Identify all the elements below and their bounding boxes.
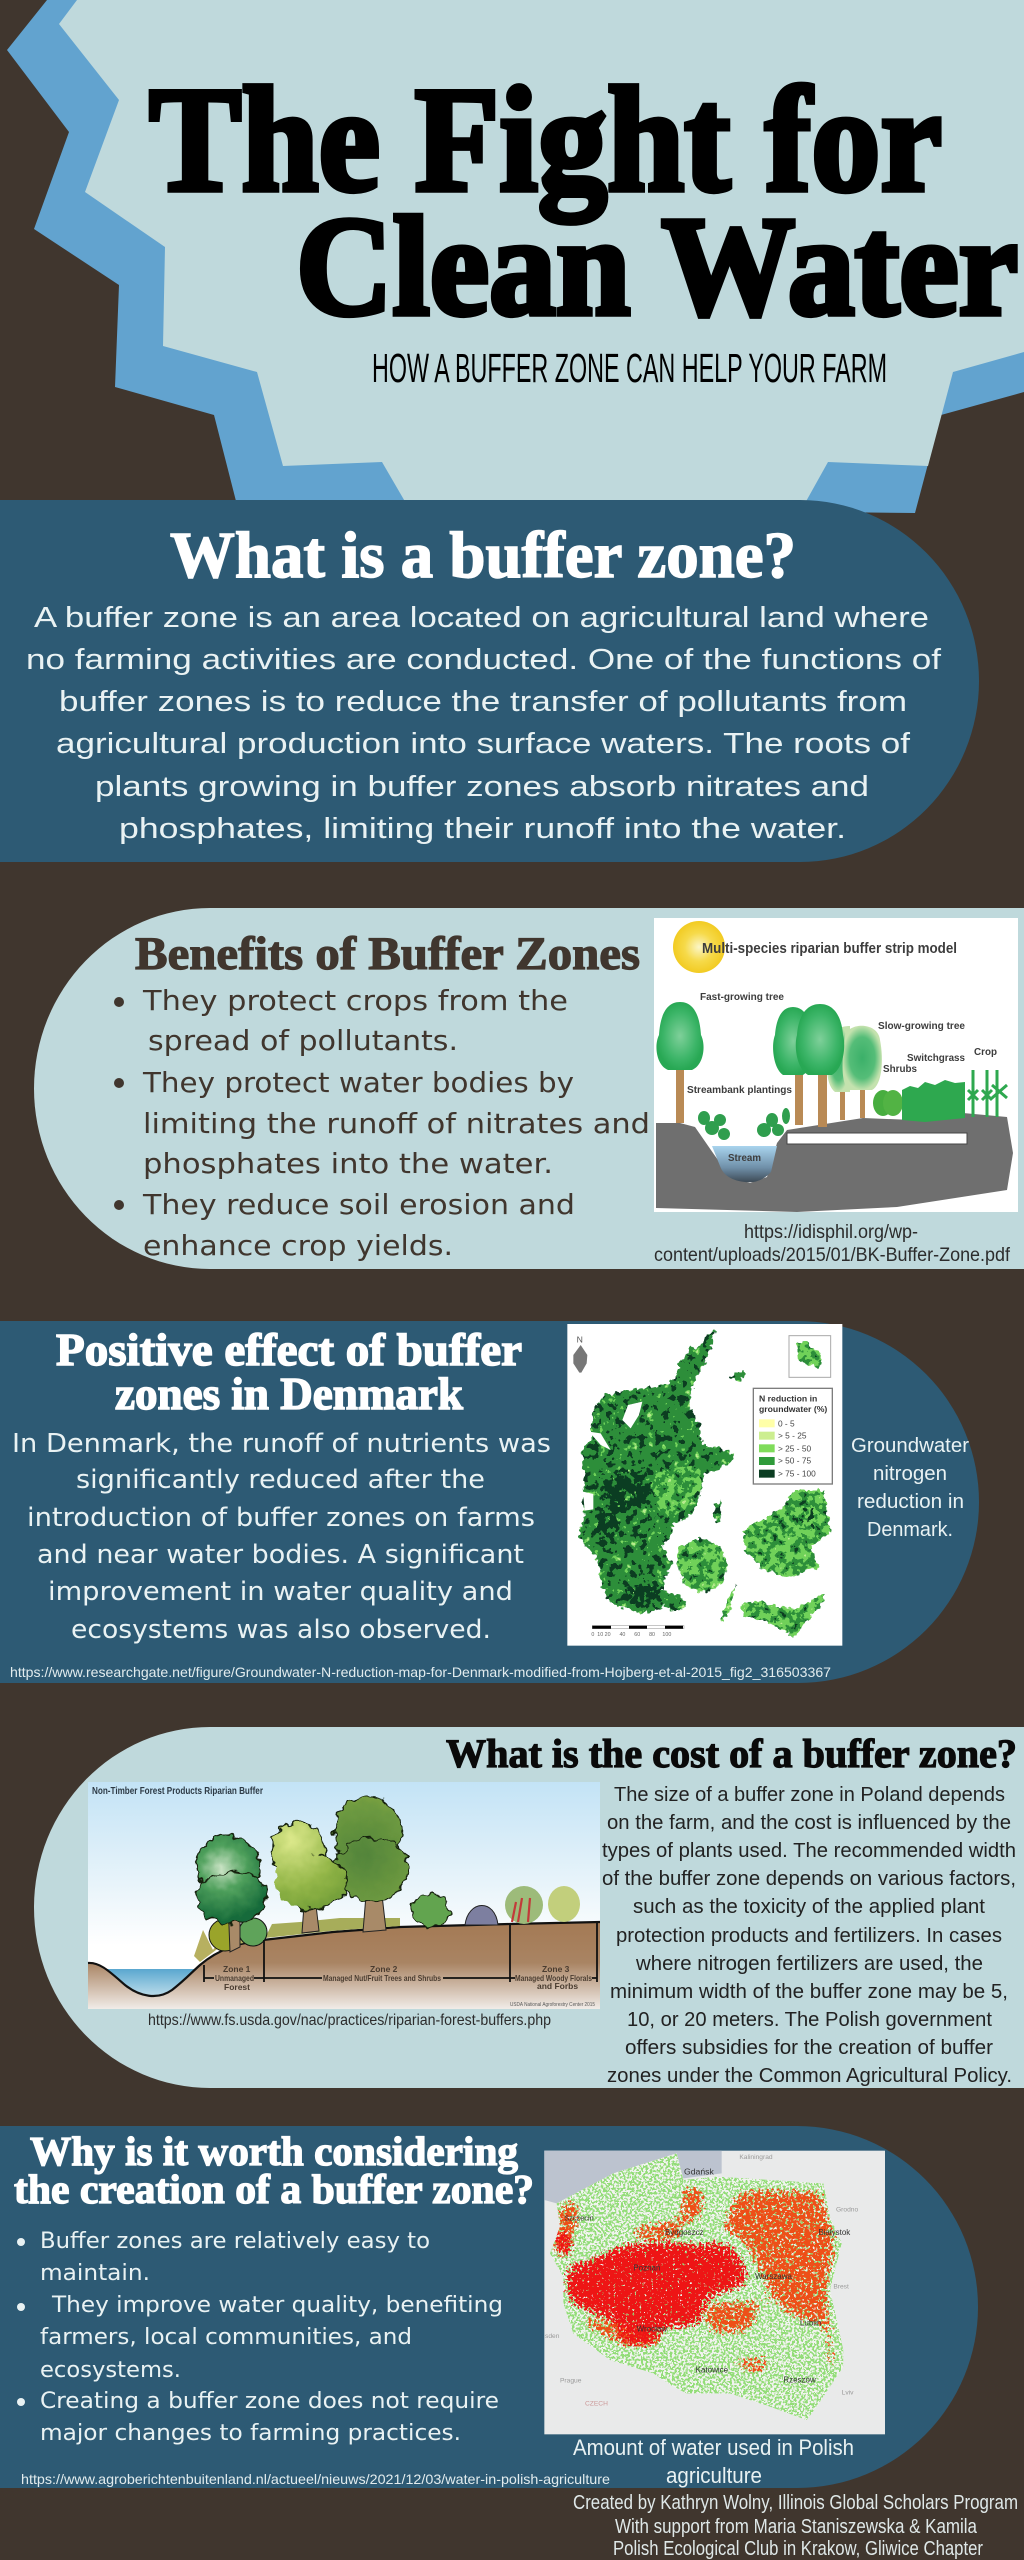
florals shrubs: [505, 1886, 580, 1924]
sky: [88, 1782, 600, 2009]
light jagged shape: [59, 0, 1024, 505]
bullet list: They reduce soil erosion and: [142, 1189, 575, 1221]
body text: and near water bodies. A significant: [37, 1540, 524, 1570]
diagram labels: [687, 941, 997, 1164]
dark patches: [587, 1463, 822, 1612]
panel background: [0, 500, 979, 862]
city labels: Lublin: [800, 2319, 821, 2328]
ground: [656, 1113, 1013, 1212]
city labels: [564, 2166, 850, 2384]
panel background: [0, 2126, 978, 2488]
body text: where nitrogen fertilizers are used, the: [635, 1952, 983, 1975]
inset frame: [789, 1336, 831, 1377]
map: water used in Polish agriculture: Grodno: [836, 2207, 858, 2214]
header: title area: [7, 0, 1024, 513]
poland land cover: [550, 2154, 844, 2420]
city labels: Białystok: [818, 2228, 850, 2237]
map legend: > 75 - 100: [778, 1468, 816, 1478]
body text: offers subsidies for the creation of buffer: [625, 2036, 993, 2059]
body text: 10, or 20 meters. The Polish government: [627, 2008, 992, 2031]
bullet list: Creating a buffer zone does not require: [40, 2389, 499, 2414]
diagram labels: Multi-species riparian buffer strip model: [702, 941, 957, 957]
image source caption: [654, 1221, 1011, 1266]
map caption: Amount of water used in Polish: [573, 2435, 854, 2460]
diagram labels: Unmanaged: [215, 1973, 254, 1983]
diagram labels: Slow-growing tree: [878, 1021, 965, 1032]
body text: of the buffer zone depends on various factors,: [602, 1867, 1016, 1890]
title: The Fight for: [149, 57, 942, 223]
panel background: [34, 1727, 1024, 2088]
panel: positive effect in Denmark: [0, 1321, 979, 1683]
body text: [26, 602, 942, 845]
illustration: riparian forest buffer zones: USDA National Agroforestry Center 2015: [510, 2002, 595, 2008]
body text: minimum width of the buffer zone may be 5,: [610, 1980, 1008, 2003]
water: [100, 1969, 204, 1999]
diagram labels: Shrubs: [883, 1064, 917, 1075]
scale bar: [591, 1626, 684, 1638]
illustration: riparian forest buffer zones: [88, 1782, 600, 2009]
image source caption: https://idisphil.org/wp-: [744, 1221, 918, 1243]
map caption: [851, 1434, 969, 1541]
bullet list: phosphates into the water.: [143, 1148, 553, 1180]
map: water used in Polish agriculture: Prague: [560, 2378, 582, 2385]
panel background: [0, 1321, 979, 1683]
icon: north arrow: N: [577, 1335, 583, 1345]
bullet list: Buffer zones are relatively easy to: [40, 2229, 430, 2254]
crop: [968, 1070, 1007, 1117]
icon: north arrow: [573, 1335, 587, 1373]
heading: [14, 2128, 534, 2212]
body text: such as the toxicity of the applied plant: [633, 1895, 985, 1918]
city labels: Bydgoszcz: [665, 2228, 704, 2237]
heading: What is the cost of a buffer zone?: [446, 1731, 1017, 1776]
panel: why consider a buffer zone: [0, 2126, 978, 2488]
heading: [56, 1324, 522, 1419]
trees: [656, 1002, 903, 1127]
ground: [88, 1922, 600, 2009]
body text: ecosystems was also observed.: [71, 1615, 491, 1645]
baltic sea: [544, 2151, 722, 2203]
panel: cost of a buffer zone: [34, 1727, 1024, 2088]
body text: The size of a buffer zone in Poland depends: [614, 1783, 1005, 1806]
diagram labels: Zone 3: [542, 1964, 570, 1974]
city labels: Poznań: [633, 2264, 660, 2273]
body text: A buffer zone is an area located on agricultural land where: [34, 602, 929, 634]
diagram labels: Zone 1: [223, 1964, 251, 1974]
city labels: Szczecin: [564, 2214, 594, 2223]
map legend: N reduction in: [759, 1395, 817, 1404]
streambank plantings: [698, 1108, 790, 1140]
bullet list: maintain.: [40, 2261, 150, 2286]
body text: agricultural production into surface waters. The roots of: [56, 728, 911, 760]
heading: the creation of a buffer zone?: [14, 2166, 534, 2212]
map legend: > 5 - 25: [778, 1431, 807, 1441]
map caption: Groundwater: [851, 1434, 969, 1457]
heading: What is a buffer zone?: [170, 519, 796, 592]
map: water used in Polish agriculture: sden: [545, 2333, 560, 2340]
bullet list: [17, 2229, 503, 2446]
image: riparian buffer strip model: [654, 918, 1018, 1212]
bullet list: ecosystems.: [40, 2358, 181, 2383]
map: water used in Polish agriculture: Kaliningrad: [739, 2154, 773, 2161]
source url: https://www.agroberichtenbuitenland.nl/actueel/nieuws/2021/12/03/water-in-polish-agriculture: [21, 2471, 610, 2487]
stream: [712, 1146, 777, 1182]
map legend: [753, 1388, 832, 1484]
diagram labels: Streambank plantings: [687, 1085, 792, 1096]
bullet list: They protect water bodies by: [142, 1067, 574, 1099]
map caption: agriculture: [666, 2463, 762, 2488]
credits: [573, 2492, 1018, 2560]
body text: In Denmark, the runoff of nutrients was: [12, 1429, 551, 1459]
map caption: reduction in: [857, 1490, 964, 1513]
city labels: Gdańsk: [684, 2166, 715, 2176]
body text: types of plants used. The recommended width: [602, 1839, 1016, 1862]
illustration: riparian forest buffer zones: Non-Timber Forest Products Riparian Buffer: [92, 1785, 263, 1797]
bullet list: [114, 985, 650, 1262]
body text: buffer zones is to reduce the transfer of pollutants from: [59, 686, 907, 718]
map: water used in Polish agriculture: Brest: [833, 2283, 849, 2290]
diagram labels: Fast-growing tree: [700, 992, 784, 1003]
map: Denmark groundwater nitrogen reduction: [567, 1324, 842, 1646]
body text: improvement in water quality and: [48, 1577, 513, 1607]
scale bar: 0 10 20 40 60 80 100: [591, 1632, 671, 1638]
diagram labels: Managed Nut/Fruit Trees and Shrubs: [323, 1973, 441, 1983]
map legend: > 25 - 50: [778, 1443, 811, 1453]
bullet list: major changes to farming practices.: [40, 2421, 461, 2446]
title: [149, 57, 1018, 345]
diagram labels: Managed Woody Florals: [515, 1973, 592, 1983]
diagram labels: and Forbs: [537, 1981, 578, 1991]
switchgrass: [902, 1080, 965, 1122]
dimension bar: [787, 1133, 967, 1144]
body text: plants growing in buffer zones absorb nitrates and: [95, 771, 869, 803]
map: water used in Polish agriculture: CZECH: [585, 2400, 608, 2407]
body text: on the farm, and the cost is influenced by the: [607, 1811, 1011, 1834]
diagram labels: Switchgrass: [907, 1053, 965, 1064]
panel: what is a buffer zone: [0, 500, 979, 862]
body text: phosphates, limiting their runoff into the water.: [119, 813, 846, 845]
heading: Positive effect of buffer: [56, 1324, 522, 1375]
body text: significantly reduced after the: [76, 1465, 485, 1495]
bullet list: They improve water quality, benefiting: [51, 2293, 503, 2318]
panel: benefits of buffer zones: [34, 908, 1024, 1269]
body text: introduction of buffer zones on farms: [27, 1503, 535, 1533]
panel background: [34, 908, 1024, 1269]
heading: zones in Denmark: [115, 1368, 463, 1419]
heading: Benefits of Buffer Zones: [135, 928, 640, 980]
bullet list: limiting the runoff of nitrates and: [143, 1108, 650, 1140]
diagram labels: [215, 1964, 592, 1992]
map caption: Denmark.: [867, 1518, 953, 1541]
diagram labels: Zone 2: [370, 1964, 398, 1974]
trunks: [228, 1895, 386, 1952]
image source caption: https://www.fs.usda.gov/nac/practices/riparian-forest-buffers.php: [148, 2012, 551, 2029]
body text: no farming activities are conducted. One of the functions of: [26, 644, 942, 676]
bullet list: spread of pollutants.: [148, 1025, 458, 1057]
icon: sun: [673, 921, 725, 973]
map legend: > 50 - 75: [778, 1456, 811, 1466]
ground line: [88, 1922, 600, 1996]
bullet list: They protect crops from the: [142, 985, 568, 1017]
map caption: nitrogen: [873, 1462, 947, 1485]
source url: https://www.researchgate.net/figure/Groundwater-N-reduction-map-for-Denmark-modified-from-Hojberg-et-al-2015_fig2_316503367: [10, 1664, 831, 1680]
body text: [12, 1429, 551, 1645]
body text: [602, 1783, 1016, 2087]
heading: Why is it worth considering: [30, 2128, 518, 2174]
diagram labels: Crop: [974, 1047, 997, 1058]
body text: protection products and fertilizers. In cases: [616, 1924, 1002, 1947]
map: water used in Polish agriculture: [544, 2151, 885, 2434]
bullet list: farmers, local communities, and: [40, 2325, 412, 2350]
blue jagged backdrop: [7, 0, 1024, 513]
city labels: Wrocław: [637, 2325, 667, 2334]
map: water used in Polish agriculture: Lviv: [842, 2389, 854, 2396]
zone lines: [204, 1923, 597, 1982]
city labels: Warszawa: [755, 2272, 793, 2281]
purple shrub: [465, 1905, 498, 1925]
city labels: Katowice: [696, 2365, 729, 2374]
tree crowns: [196, 1796, 448, 1927]
grasses and understory: [194, 1918, 400, 1962]
city labels: Rzeszów: [783, 2375, 816, 2384]
map legend: 0 - 5: [778, 1418, 795, 1428]
diagram labels: Forest: [224, 1982, 250, 1992]
map caption: [573, 2435, 854, 2488]
map land: Jutland, Funen, Zealand and islands: [579, 1330, 831, 1637]
diagram labels: Stream: [728, 1153, 761, 1164]
map legend: groundwater (%): [759, 1405, 828, 1414]
body text: zones under the Common Agricultural Policy.: [607, 2064, 1012, 2087]
bullet list: enhance crop yields.: [143, 1230, 453, 1262]
